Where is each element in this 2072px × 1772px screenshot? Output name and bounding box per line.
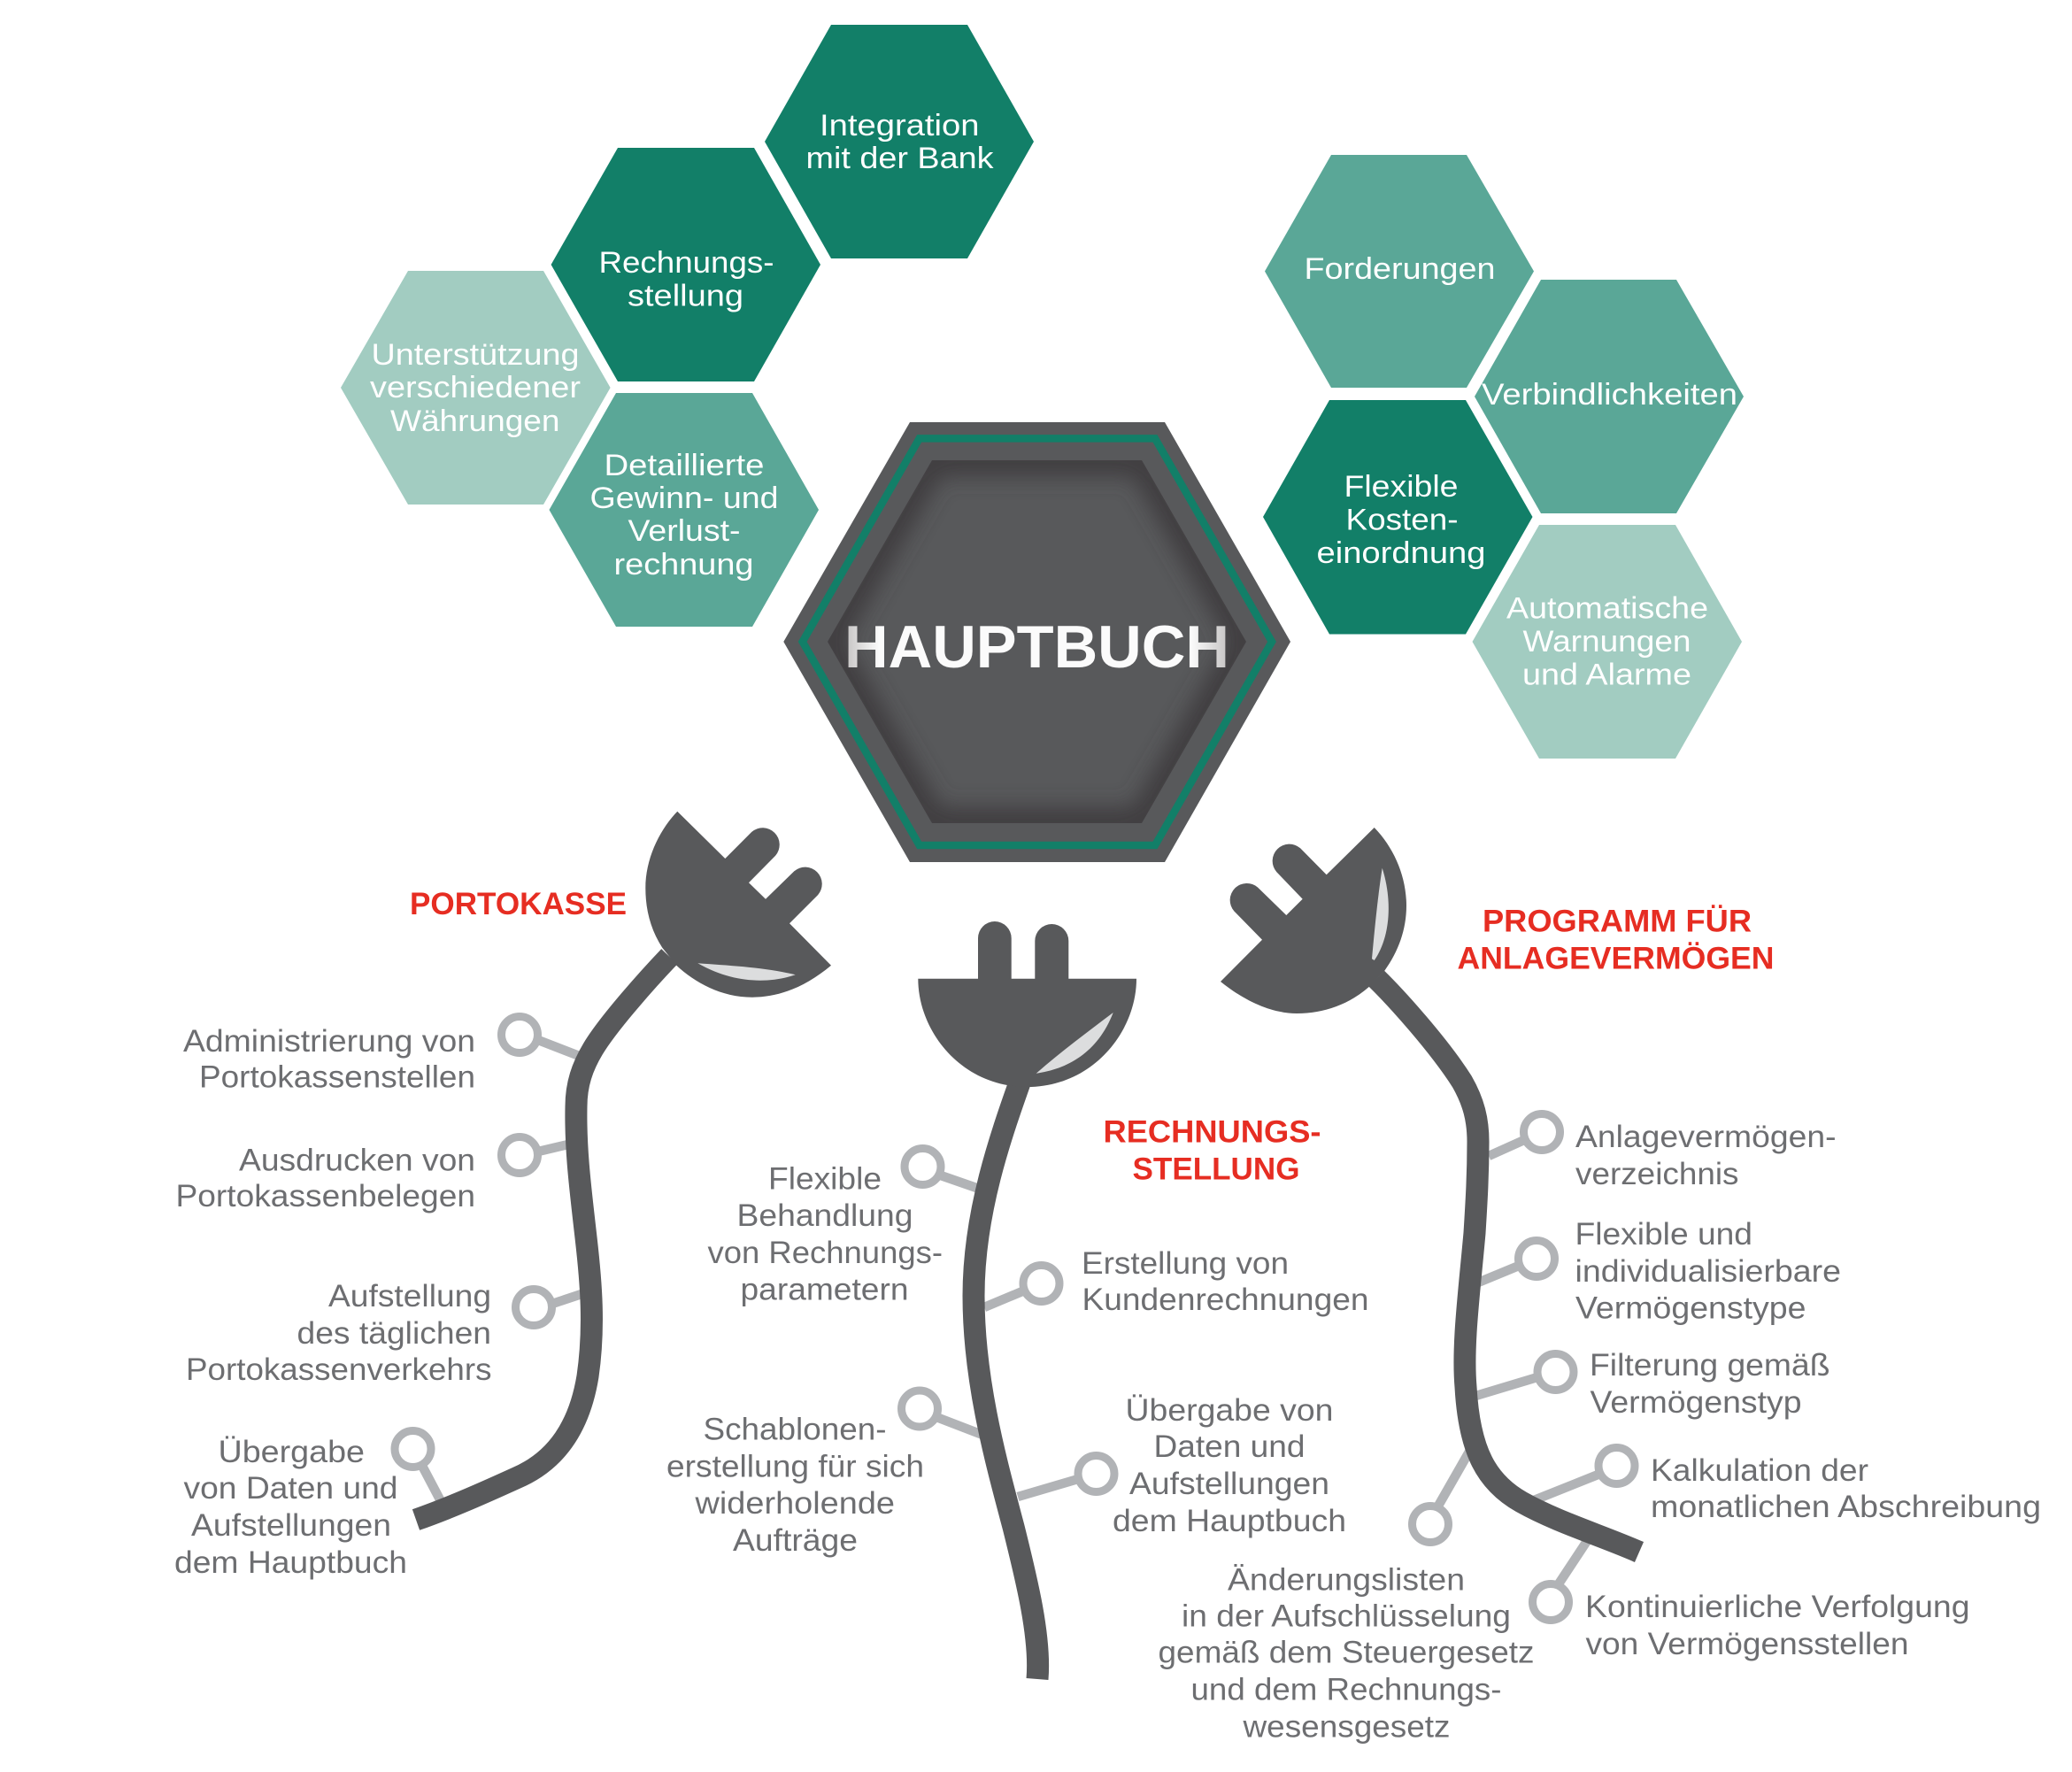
hexagon: Integration mit der Bank	[765, 25, 1034, 258]
label: Flexible und individualisierbare Vermögenstype: individualisierbare	[1575, 1254, 1841, 1289]
label: Änderungslisten in der Aufschlüsselung: gemäß dem Steuergesetz	[1158, 1636, 1535, 1669]
label: Administrierung von Portokassenstellen: Portokassenstellen	[199, 1060, 475, 1094]
label: Flexible Behandlung von Rechnungsparametern: parametern	[740, 1273, 908, 1306]
hexagon: Unterstützung verschiedener Währungen	[341, 271, 611, 505]
connectors: Portokasse branch	[395, 1016, 582, 1501]
label: Aufstellung des täglichen Portokassenverkehrs: Portokassenverkehrs	[186, 1352, 492, 1387]
label: Flexible Behandlung von Rechnungsparametern: Behandlung	[736, 1198, 913, 1233]
central hexagon: Hauptbuch	[783, 422, 1290, 862]
heading: Programm für Anlagevermögen: ANLAGEVERMÖGEN	[1457, 942, 1774, 975]
title: HAUPTBUCH	[844, 613, 1229, 681]
cord: Rechnungsstellung	[974, 1073, 1038, 1679]
label: Flexible und individualisierbare Vermögenstype: Vermögenstype	[1575, 1290, 1806, 1326]
label: Änderungslisten in der Aufschlüsselung: Änderungslisten	[1228, 1563, 1465, 1597]
label: Aufstellung des täglichen Portokassenverkehrs: des täglichen	[297, 1316, 491, 1351]
label: Kontinuierliche Verfolgung von Vermögensstellen: Kontinuierliche Verfolgung	[1585, 1590, 1970, 1624]
hexagon: Detaillierte Gewinn- und Verlustrechnung: Gewinn- und	[589, 482, 779, 515]
hexagon: Verbindlichkeiten	[1475, 280, 1744, 513]
label: Ausdrucken von Portokassenbelegen	[175, 1144, 475, 1213]
label: Schablonenerstellung für sich widerholende Aufträge	[666, 1413, 924, 1558]
connectors: Anlagevermögen branch	[1413, 1113, 1635, 1620]
heading: Rechnungsstellung: RECHNUNGS-	[1103, 1115, 1321, 1149]
hexagon: Rechnungsstellung: Rechnungs-	[598, 246, 774, 280]
label: Anlagevermögenverzeichnis: Anlagevermögen-	[1575, 1120, 1836, 1154]
label: Kalkulation der monatlichen Abschreibung: monatlichen Abschreibung	[1651, 1490, 2041, 1524]
label: Kalkulation der monatlichen Abschreibung	[1651, 1453, 2041, 1524]
hexagon: Unterstützung verschiedener Währungen: Unterstützung	[372, 338, 579, 372]
hexagon: Flexible Kosteneinordnung	[1263, 400, 1533, 634]
label: Filterung gemäß Vermögenstyp: Filterung gemäß	[1590, 1348, 1830, 1383]
label: Übergabe von Daten und Aufstellungen dem Hauptbuch (Rechnungsstellung): Daten und	[1154, 1429, 1305, 1464]
label: Übergabe von Daten und Aufstellungen dem Hauptbuch (Rechnungsstellung): Übergabe von	[1126, 1393, 1333, 1428]
label: Übergabe von Daten und Aufstellungen dem Hauptbuch (Portokasse): dem Hauptbuch	[174, 1545, 407, 1580]
plug: Portokasse	[645, 812, 831, 998]
label: Administrierung von Portokassenstellen: Administrierung von	[183, 1024, 475, 1059]
hexagon: Flexible Kosteneinordnung: einordnung	[1317, 536, 1485, 570]
hexagon: Detaillierte Gewinn- und Verlustrechnung: rechnung	[614, 548, 754, 582]
label: Flexible und individualisierbare Vermögenstype: Flexible und	[1575, 1217, 1752, 1252]
plug: Rechnungsstellung	[918, 921, 1136, 1087]
hexagon: Detaillierte Gewinn- und Verlustrechnung: Verlust-	[628, 514, 740, 548]
hexagon: Detaillierte Gewinn- und Verlustrechnung	[549, 393, 819, 627]
cord: Portokasse	[416, 957, 669, 1520]
label: Aufstellung des täglichen Portokassenverkehrs: Aufstellung	[328, 1279, 491, 1314]
label: Übergabe von Daten und Aufstellungen dem Hauptbuch (Portokasse): Übergabe	[218, 1435, 365, 1469]
label: Schablonenerstellung für sich widerholende Aufträge: Aufträge	[733, 1523, 858, 1558]
hexagon: Rechnungsstellung	[551, 148, 820, 381]
hexagon: Forderungen	[1265, 155, 1534, 388]
label: Übergabe von Daten und Aufstellungen dem Hauptbuch (Portokasse)	[174, 1435, 407, 1580]
label: Änderungslisten in der Aufschlüsselung: in der Aufschlüsselung	[1182, 1599, 1511, 1634]
hexagon: Unterstützung verschiedener Währungen: verschiedener	[370, 371, 581, 404]
label: Übergabe von Daten und Aufstellungen dem Hauptbuch (Portokasse): Aufstellungen	[191, 1508, 391, 1543]
hexagon: Automatische Warnungen und Alarme: Automatische	[1506, 591, 1708, 625]
label: Administrierung von Portokassenstellen	[183, 1024, 475, 1094]
label: Ausdrucken von Portokassenbelegen: Portokassenbelegen	[175, 1179, 475, 1213]
hexagon: Automatische Warnungen und Alarme: Warnungen	[1522, 625, 1691, 659]
label: Aufstellung des täglichen Portokassenverkehrs	[186, 1279, 492, 1387]
label: Übergabe von Daten und Aufstellungen dem Hauptbuch (Portokasse): von Daten und	[184, 1471, 398, 1506]
hexagon: Forderungen: Forderungen	[1305, 252, 1496, 286]
connectors: Rechnungsstellung branch	[901, 1149, 1114, 1497]
label: Übergabe von Daten und Aufstellungen dem Hauptbuch (Rechnungsstellung): Aufstellungen	[1129, 1467, 1329, 1501]
label: Übergabe von Daten und Aufstellungen dem Hauptbuch (Rechnungsstellung): dem Hauptbuch	[1113, 1504, 1346, 1538]
label: Flexible und individualisierbare Vermögenstype	[1575, 1217, 1841, 1326]
label: Ausdrucken von Portokassenbelegen: Ausdrucken von	[239, 1144, 475, 1177]
hexagon: Automatische Warnungen und Alarme: und Alarme	[1522, 659, 1691, 692]
label: Schablonenerstellung für sich widerholende Aufträge: widerholende	[694, 1486, 895, 1521]
label: Anlagevermögenverzeichnis: verzeichnis	[1575, 1157, 1738, 1191]
label: Änderungslisten in der Aufschlüsselung	[1158, 1563, 1535, 1744]
label: Kontinuierliche Verfolgung von Vermögensstellen	[1585, 1590, 1970, 1661]
label: Erstellung von Kundenrechnungen: Erstellung von	[1082, 1246, 1289, 1281]
hexagon: Flexible Kosteneinordnung: Flexible	[1344, 470, 1459, 504]
label: Filterung gemäß Vermögenstyp	[1590, 1348, 1830, 1420]
hexagon: Rechnungsstellung: stellung	[628, 280, 743, 313]
label: Schablonenerstellung für sich widerholende Aufträge: erstellung für sich	[666, 1450, 924, 1483]
label: Flexible Behandlung von Rechnungsparametern	[708, 1161, 943, 1306]
heading: Programm für Anlagevermögen: PROGRAMM FÜR	[1483, 905, 1752, 938]
hexagon: Integration mit der Bank: mit der Bank	[805, 142, 995, 175]
heading: Rechnungsstellung	[1103, 1115, 1321, 1186]
label: Flexible Behandlung von Rechnungsparametern: Flexible	[768, 1161, 882, 1197]
label: Erstellung von Kundenrechnungen: Kundenrechnungen	[1082, 1283, 1368, 1317]
label: Kontinuierliche Verfolgung von Vermögensstellen: von Vermögensstellen	[1586, 1627, 1908, 1661]
label: Änderungslisten in der Aufschlüsselung: wesensgesetz	[1242, 1710, 1450, 1744]
label: Kalkulation der monatlichen Abschreibung: Kalkulation der	[1651, 1453, 1868, 1488]
hexagon: Flexible Kosteneinordnung: Kosten-	[1345, 503, 1459, 536]
cord: Anlagevermögen	[1376, 979, 1639, 1552]
label: Flexible Behandlung von Rechnungsparametern: von Rechnungs-	[708, 1236, 943, 1270]
plug: Anlagevermögen	[1221, 828, 1406, 1013]
hexagon: Unterstützung verschiedener Währungen: Währungen	[390, 404, 559, 438]
label: Anlagevermögenverzeichnis	[1575, 1120, 1836, 1191]
hexagon: Integration mit der Bank: Integration	[820, 109, 979, 143]
label: Filterung gemäß Vermögenstyp: Vermögenstyp	[1590, 1385, 1802, 1420]
hexagon: Verbindlichkeiten: Verbindlichkeiten	[1482, 378, 1737, 412]
heading: Rechnungsstellung: STELLUNG	[1133, 1152, 1299, 1186]
heading: Portokasse: PORTOKASSE	[410, 887, 627, 921]
label: Übergabe von Daten und Aufstellungen dem Hauptbuch (Rechnungsstellung)	[1113, 1393, 1346, 1538]
hexagon: Detaillierte Gewinn- und Verlustrechnung: Detaillierte	[604, 449, 765, 482]
heading: Programm für Anlagevermögen	[1457, 905, 1774, 975]
label: Änderungslisten in der Aufschlüsselung: und dem Rechnungs-	[1191, 1673, 1501, 1707]
label: Erstellung von Kundenrechnungen	[1082, 1246, 1368, 1317]
hexagon: Automatische Warnungen und Alarme	[1473, 525, 1742, 759]
label: Schablonenerstellung für sich widerholende Aufträge: Schablonen-	[703, 1413, 887, 1446]
